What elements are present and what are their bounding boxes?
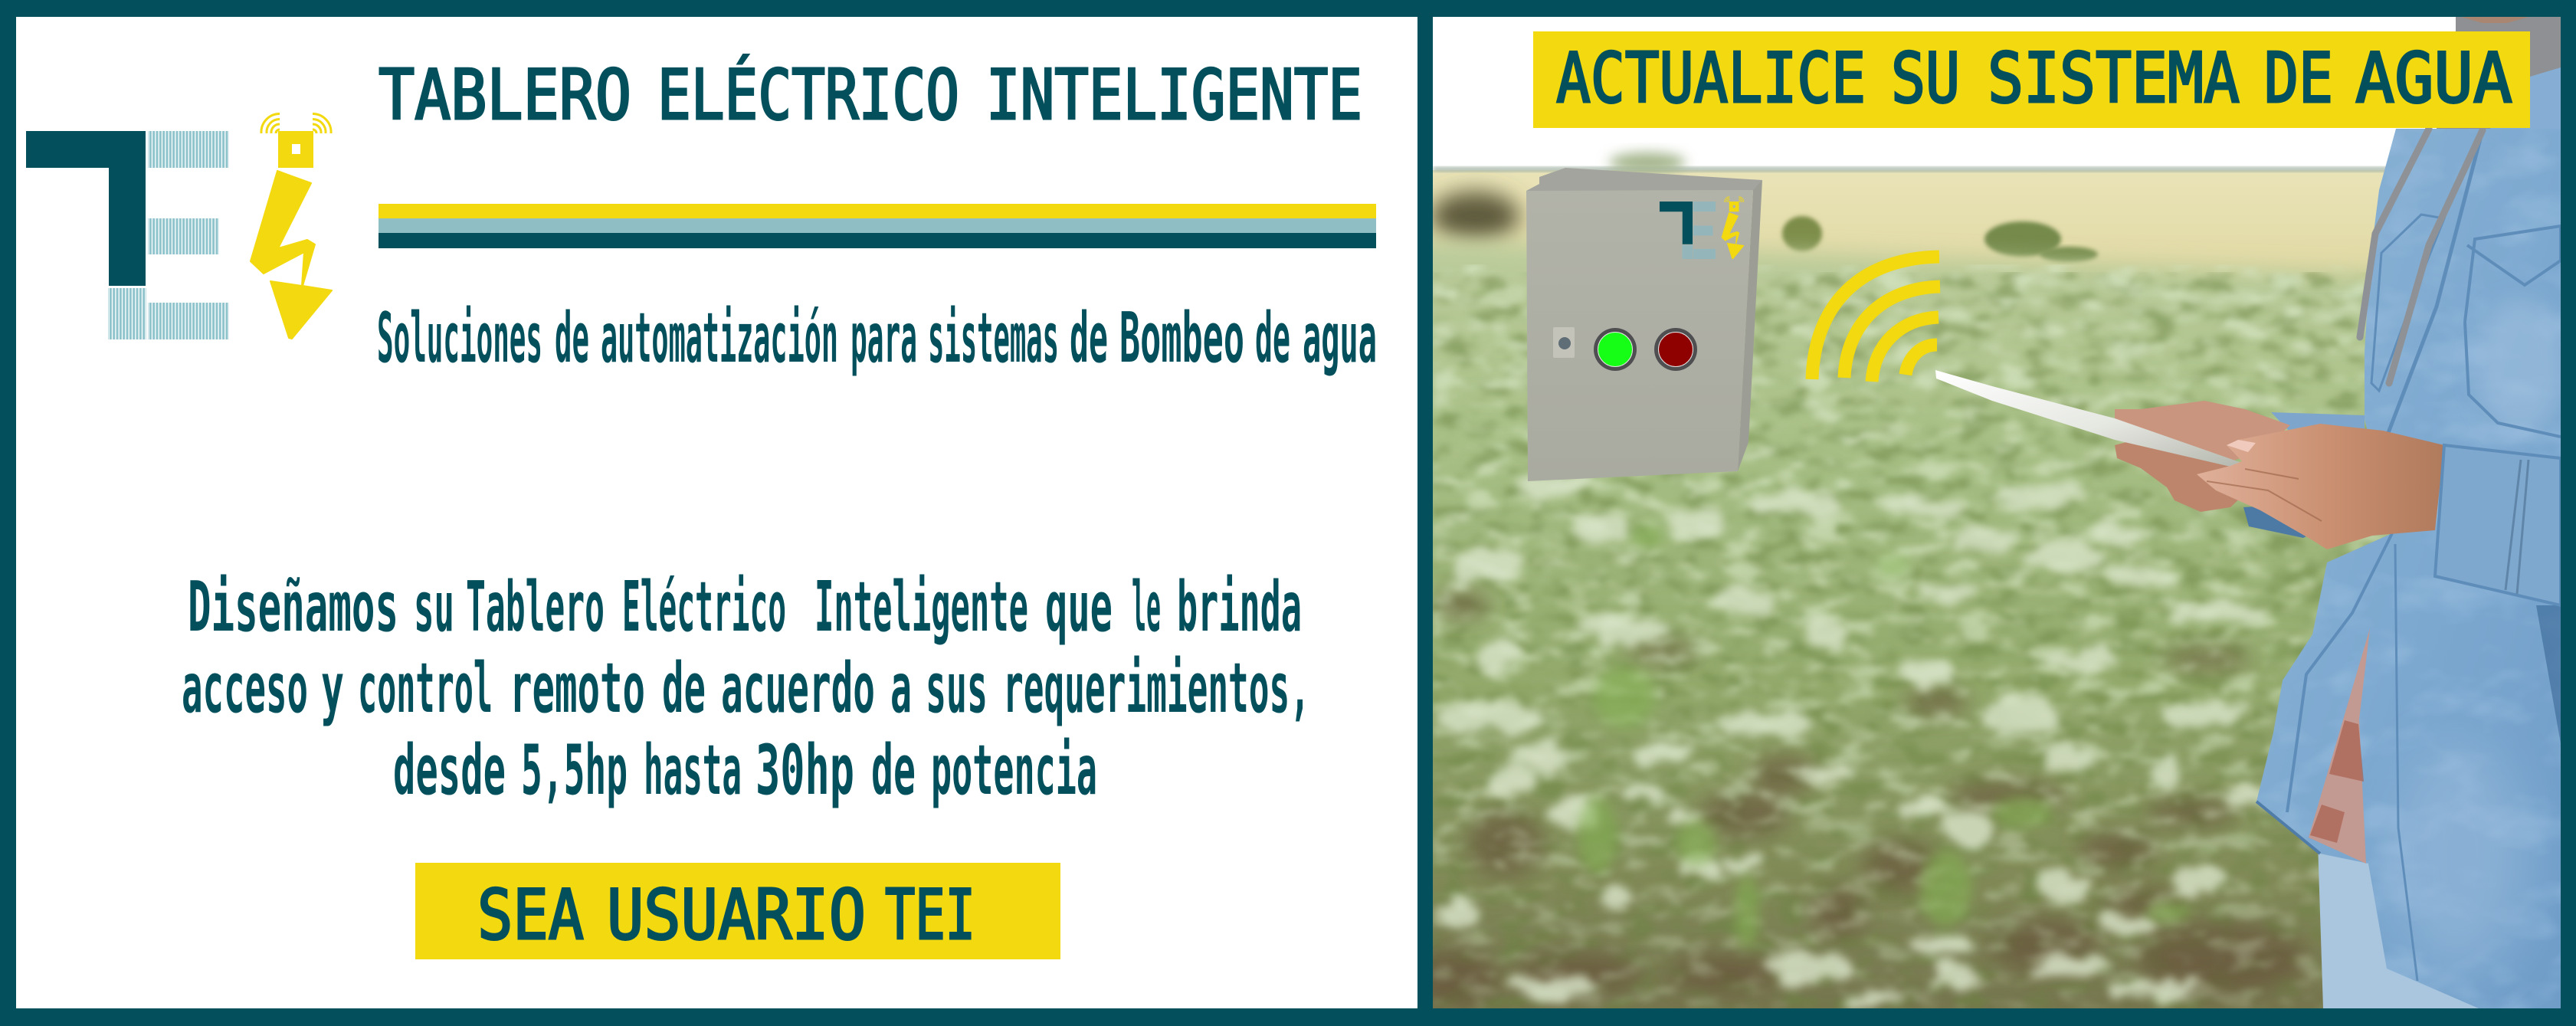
rear sleeve and lower cuff xyxy=(2243,412,2365,538)
banner: heading: DE xyxy=(2264,38,2333,119)
logo: TEI xyxy=(26,113,332,339)
banner: heading: AGUA xyxy=(2355,38,2512,119)
banner: heading: ACTUALICE xyxy=(1556,38,1866,119)
subtitle: sistemas xyxy=(928,298,1059,379)
heading: product title: INTELIGENTE xyxy=(986,55,1362,136)
person with tablet xyxy=(1935,17,2567,1011)
body text: brinda xyxy=(1177,567,1302,647)
body text: a xyxy=(890,648,912,729)
banner: heading xyxy=(1533,31,2530,128)
front hand and forearm xyxy=(2197,424,2444,549)
body text: Tablero xyxy=(466,567,605,647)
body text: acuerdo xyxy=(721,648,875,729)
button: call to action: USUARIO xyxy=(607,875,866,956)
red indicator xyxy=(1654,328,1697,371)
panel: field photo scene xyxy=(1402,17,2567,1026)
shirt sleeve xyxy=(2435,445,2561,605)
subtitle: de xyxy=(555,298,589,379)
hood drawstrings xyxy=(2360,129,2483,383)
fabric highlights xyxy=(2253,123,2567,1011)
button: call to action: TEI xyxy=(885,875,975,956)
infographic canvas: agua xyxy=(1303,298,1377,379)
body text: que xyxy=(1045,567,1113,647)
subtitle: Bombeo xyxy=(1119,298,1244,379)
body text: Eléctrico xyxy=(622,567,786,647)
body text: sus xyxy=(926,648,988,729)
subtitle: Soluciones xyxy=(377,298,542,379)
denim shirt xyxy=(2256,129,2561,1008)
body text: control xyxy=(358,648,493,729)
shirt seams xyxy=(2256,130,2561,981)
button: call to action xyxy=(415,863,1060,959)
body text: desde xyxy=(393,730,506,811)
body text: remoto xyxy=(510,648,645,729)
body text: 30hp xyxy=(755,730,854,811)
heading: product title: ELÉCTRICO xyxy=(657,54,959,136)
body text: su xyxy=(414,567,454,647)
jeans xyxy=(2318,843,2479,1008)
body text: hasta xyxy=(644,730,742,811)
subtitle: de xyxy=(1255,298,1290,379)
banner: heading: SISTEMA xyxy=(1988,38,2240,119)
body text: de xyxy=(871,730,916,811)
product: electrical enclosure xyxy=(1526,168,1762,481)
tricolour stripes xyxy=(379,204,1376,248)
banner: heading: SU xyxy=(1891,38,1960,119)
distant fields and trees xyxy=(1433,144,2386,290)
body text: potencia xyxy=(931,730,1097,811)
tablet xyxy=(1935,370,2242,467)
body text: acceso xyxy=(182,648,308,729)
sky xyxy=(1433,17,2561,170)
green indicator xyxy=(1594,328,1637,371)
button: call to action: SEA xyxy=(477,875,584,956)
mini logo xyxy=(1660,197,1744,259)
body text: 5,5hp xyxy=(521,730,628,811)
rear hand xyxy=(2115,401,2290,512)
subtitle: para xyxy=(850,298,917,379)
panel: left product description: requerimientos, xyxy=(1003,648,1310,729)
subtitle: automatización xyxy=(601,298,838,379)
heading: product title: TABLERO xyxy=(379,55,631,136)
lock xyxy=(1553,327,1575,358)
icon: wifi signal xyxy=(1812,257,1940,382)
subtitle: de xyxy=(1070,298,1108,379)
body text xyxy=(182,567,1310,811)
body text: de xyxy=(662,648,706,729)
body text: Inteligente xyxy=(814,567,1028,647)
crop field xyxy=(1433,228,2391,1008)
plaid undershirt xyxy=(2309,628,2370,864)
panel: left product description xyxy=(26,54,1377,959)
body text: y xyxy=(321,648,344,729)
body text: Diseñamos xyxy=(188,567,398,647)
neck and hood xyxy=(2437,17,2561,129)
body text: le xyxy=(1132,567,1161,647)
